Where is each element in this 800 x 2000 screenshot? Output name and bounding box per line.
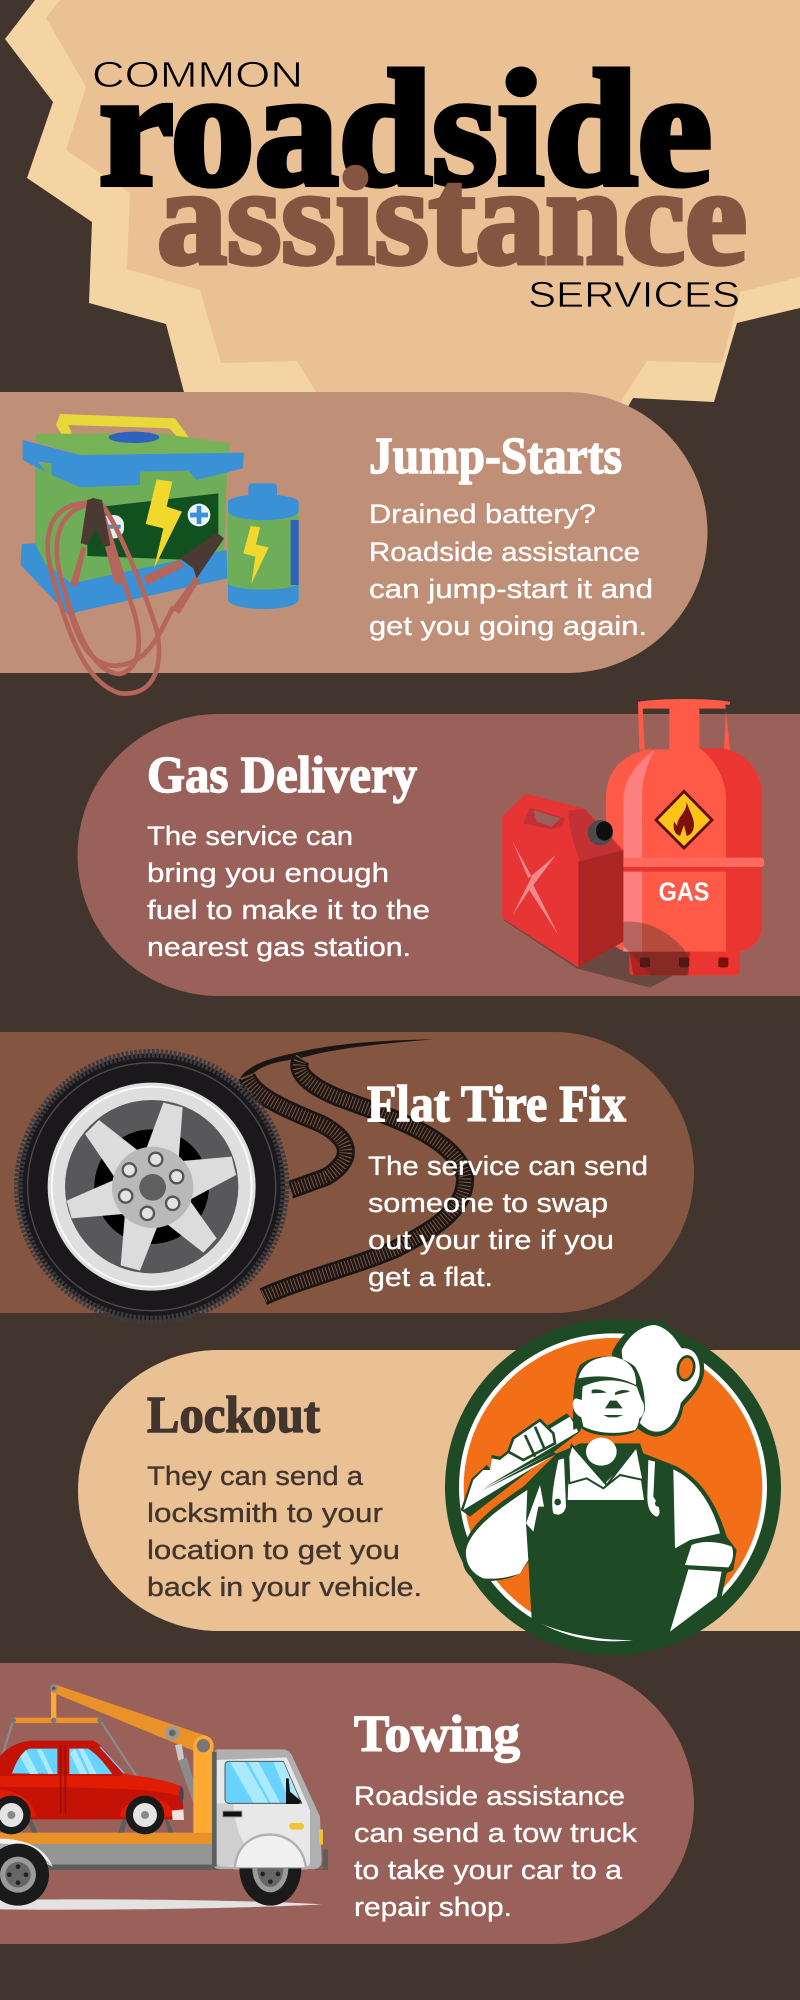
heading: flat tire fix: Flat Tire Fix [367, 1076, 626, 1133]
heading: lockout: Lockout [147, 1387, 321, 1444]
header burst background [5, 0, 800, 412]
label: gas: GAS [659, 876, 709, 906]
text: gas delivery description: bring you enough [147, 858, 389, 888]
text: flat tire fix description: get a flat. [368, 1262, 493, 1292]
text: towing description: can send a tow truck [354, 1818, 638, 1848]
text: lockout description: They can send a [147, 1461, 364, 1491]
text: jump-starts description [369, 499, 653, 641]
title line: common: COMMON [92, 54, 303, 95]
title [92, 37, 747, 315]
rear wheel [0, 1839, 53, 1906]
text: jump-starts description: get you going again. [369, 611, 647, 641]
panel: gas delivery [77, 699, 800, 996]
icon: giant key [461, 1320, 704, 1517]
heading: jump-starts: Jump-Starts [369, 428, 622, 485]
panel: lockout [78, 1319, 800, 1655]
text: towing description: repair shop. [354, 1892, 512, 1922]
text: flat tire fix description: someone to swap [368, 1188, 608, 1218]
title line: roadside: roadside [99, 37, 712, 220]
title line: assistance: assistance [157, 140, 747, 293]
panel: towing [0, 1663, 694, 1944]
panel: jump-starts [0, 392, 708, 694]
icon: small battery [228, 483, 299, 609]
text: gas delivery description: nearest gas station. [147, 932, 411, 962]
panel: flat tire fix [0, 1032, 694, 1320]
text: jump-starts description: Drained battery? [369, 499, 596, 529]
text: flat tire fix description: The service can send [368, 1151, 648, 1181]
text: lockout description: location to get you [147, 1535, 400, 1565]
icon: gas cylinder and jerry can [502, 699, 764, 988]
icon: tire and alloy wheel [18, 1053, 285, 1320]
text: gas delivery description [147, 821, 430, 962]
front wheel [239, 1868, 301, 1906]
text: flat tire fix description: out your tire if you [368, 1225, 614, 1255]
text: lockout description: locksmith to your [147, 1498, 383, 1528]
text: jump-starts description: can jump-start it and [369, 574, 653, 604]
icon: jerry can [502, 794, 623, 967]
text: lockout description [147, 1461, 422, 1602]
truck cab [212, 1749, 328, 1870]
icon: car battery with jumper cables [21, 414, 299, 694]
truck bed [0, 1833, 220, 1870]
text: jump-starts description: Roadside assistance [369, 537, 640, 567]
text: towing description: Roadside assistance [354, 1781, 625, 1811]
text: lockout description: back in your vehicle. [147, 1572, 422, 1602]
text: towing description [354, 1781, 638, 1922]
title line: services: SERVICES [528, 274, 740, 315]
figure: man in overalls [462, 1356, 737, 1640]
red car [0, 1741, 184, 1834]
tire tracks [240, 1039, 465, 1297]
icon: tow truck carrying red car [0, 1684, 328, 1910]
text: towing description: to take your car to a [354, 1855, 623, 1885]
text: flat tire fix description [368, 1151, 648, 1292]
text: gas delivery description: fuel to make it to the [147, 895, 430, 925]
text: gas delivery description: The service can [147, 821, 353, 851]
ground shadow [0, 1899, 322, 1910]
heading: towing: Towing [354, 1706, 520, 1763]
heading: gas delivery: Gas Delivery [147, 747, 417, 804]
icon: gas cylinder [606, 699, 764, 975]
icon: locksmith emblem [445, 1319, 781, 1655]
